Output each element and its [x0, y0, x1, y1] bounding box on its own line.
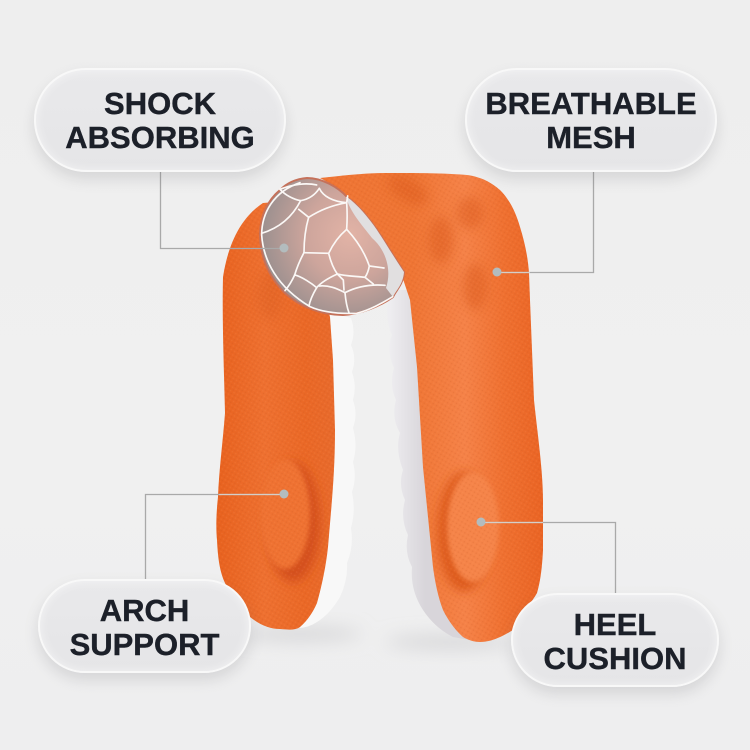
callout line: heel cushion [476, 518, 616, 593]
arch pit [260, 459, 320, 582]
left foam layer [298, 312, 356, 628]
right foam layer [387, 290, 480, 642]
insole illustration [144, 172, 616, 653]
callout line: shock absorbing [160, 172, 288, 252]
label: shock absorbing [34, 68, 286, 172]
floor shadows [238, 628, 515, 648]
label: shock absorbing: ABSORBING [65, 120, 255, 154]
top dimples [391, 177, 488, 310]
label: breathable mesh: MESH [546, 120, 636, 154]
label: heel cushion: CUSHION [544, 640, 686, 676]
label: shock absorbing: SHOCK [104, 86, 216, 120]
left insole [216, 202, 335, 630]
label: arch support: SUPPORT [70, 626, 219, 662]
lens cutaway [260, 178, 404, 315]
label: heel cushion [511, 593, 719, 687]
left forefoot dimple [266, 285, 273, 306]
callout line: breathable mesh [492, 172, 594, 276]
right insole [320, 169, 550, 650]
callout line: arch support [146, 490, 288, 579]
label: arch support [38, 579, 251, 673]
honeycomb cells [262, 183, 393, 313]
label: breathable mesh: BREATHABLE [485, 86, 697, 120]
label: breathable mesh [465, 68, 717, 172]
foam inside lens [346, 197, 404, 297]
heel pit [437, 472, 499, 592]
label: arch support: ARCH [100, 592, 189, 628]
label: heel cushion: HEEL [574, 606, 656, 642]
